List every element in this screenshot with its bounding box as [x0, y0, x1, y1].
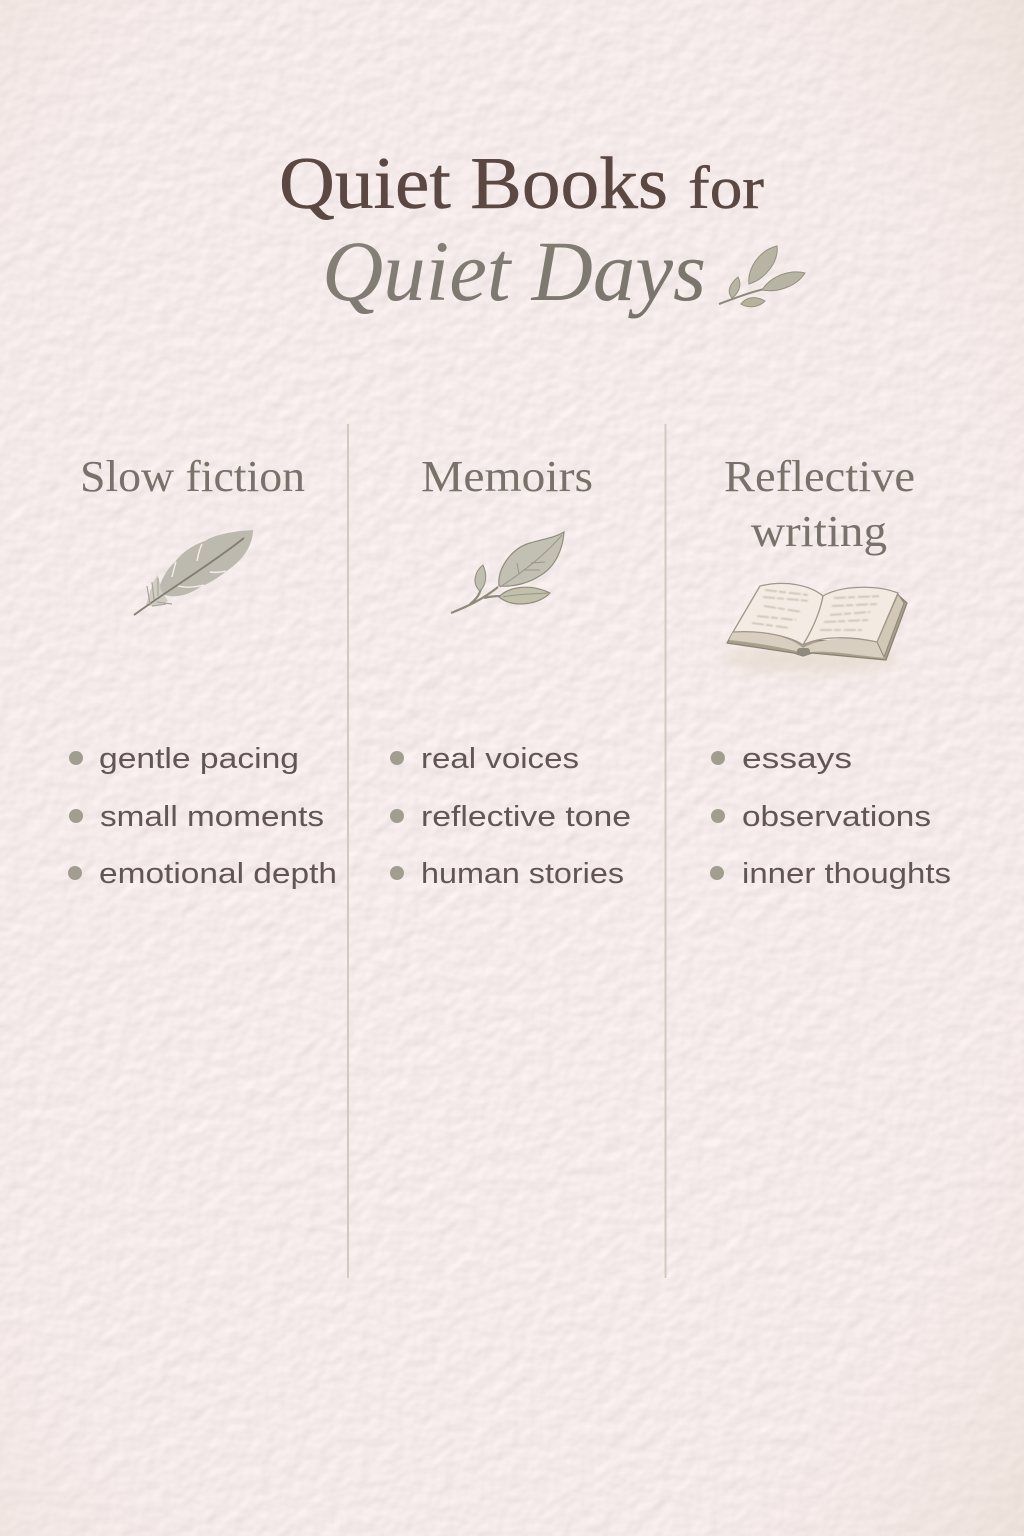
bullet: observations: observations: [742, 801, 931, 833]
bullet: inner thoughts: inner thoughts: [742, 858, 951, 890]
heading: slow fiction: Slow fiction: [80, 452, 305, 501]
bullet: gentle pacing: gentle pacing: [99, 743, 299, 775]
bullet: emotional depth: emotional depth: [99, 858, 337, 890]
icon: title sprig: [719, 246, 805, 307]
icon: feather: [134, 530, 253, 615]
title line one: for: [688, 155, 764, 221]
heading: reflective writing: Reflective: [724, 452, 915, 501]
panel: memoirs: [390, 452, 631, 890]
bullet: real voices: real voices: [421, 743, 579, 775]
column dividers: [347, 424, 666, 1278]
bullet: small moments: small moments: [100, 801, 324, 833]
bullet: essays: essays: [742, 743, 852, 775]
title: [279, 143, 805, 319]
heading: reflective writing: [724, 452, 915, 556]
list: memoirs: [390, 743, 631, 890]
icon: leaf branch: [451, 532, 564, 613]
list: reflective writing: [710, 743, 951, 890]
panel: reflective writing: [710, 452, 951, 890]
heading: memoirs: Memoirs: [421, 452, 593, 501]
bullet: essays: [711, 743, 852, 775]
title line two script: Quiet Days: [322, 223, 706, 319]
title line one: Quiet Books: [279, 143, 668, 225]
list: slow fiction: [68, 743, 337, 890]
bullet: reflective tone: reflective tone: [421, 801, 631, 833]
bullet: human stories: human stories: [421, 858, 624, 890]
heading: reflective writing: writing: [751, 507, 887, 556]
panel: slow fiction: [68, 452, 337, 890]
icon: open book: [720, 583, 907, 672]
